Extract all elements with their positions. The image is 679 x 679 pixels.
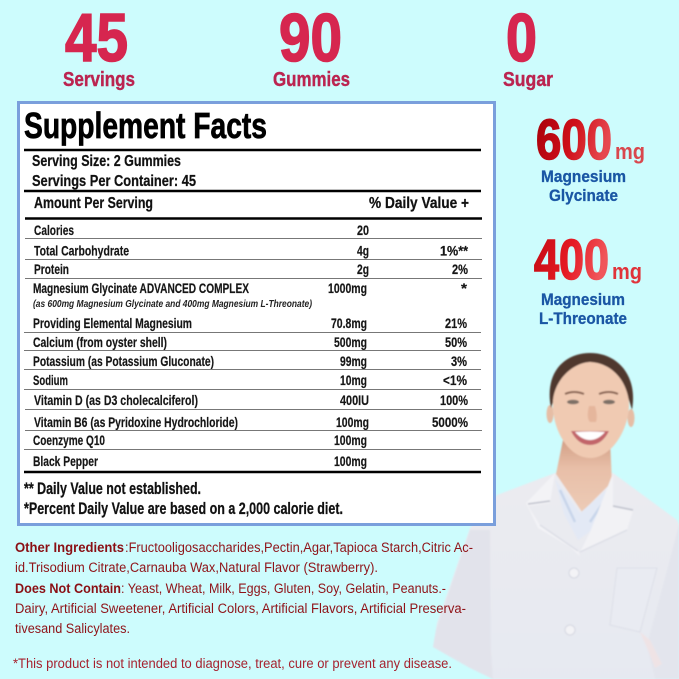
text block: does not contain: Does Not Contain xyxy=(15,581,121,596)
eyes xyxy=(567,400,579,404)
nutrient rows: 100mg xyxy=(334,433,367,448)
nutrient rows: 21% xyxy=(445,316,467,331)
nutrient rows: 50% xyxy=(445,335,467,350)
nutrient rows: Calories xyxy=(34,223,74,238)
photo: smiling woman in lab coat xyxy=(433,353,679,679)
nutrient rows: 5000% xyxy=(432,415,468,430)
callout: 400mg magnesium l-threonate: L-Threonate xyxy=(539,309,627,328)
smile xyxy=(571,431,609,445)
ears xyxy=(546,405,554,423)
nutrient rows xyxy=(24,223,482,469)
footnotes: *Percent Daily Value are based on a 2,000 calorie diet. xyxy=(24,500,343,518)
stat: 90 gummies: Gummies xyxy=(273,69,350,91)
text block: does not contain xyxy=(15,581,466,636)
callout: 400mg magnesium l-threonate: mg xyxy=(612,259,642,284)
coat lapels xyxy=(526,473,580,556)
pocket xyxy=(610,568,657,632)
neck xyxy=(556,440,612,512)
stat: 45 servings: 45 xyxy=(65,0,128,76)
nutrient rows: 99mg xyxy=(340,354,367,369)
nutrient rows: 100mg xyxy=(336,415,369,430)
text block: other ingredients: id.Trisodium Citrate,Carnauba Wax,Natural Flavor (Strawberry). xyxy=(15,560,378,575)
nutrient rows: 70.8mg xyxy=(331,316,367,331)
column headers: % Daily Value + xyxy=(369,195,469,212)
shirt collar xyxy=(555,479,613,540)
callout: 600mg magnesium glycinate: mg xyxy=(615,139,645,164)
nutrient rows: 100% xyxy=(440,393,468,408)
serving info: Serving Size: 2 Gummies xyxy=(32,153,181,170)
stat: 0 sugar: 0 xyxy=(506,0,537,76)
text block: other ingredients: Other Ingredients xyxy=(15,540,124,555)
text block: does not contain: Dairy, Artificial Sweetener, Artificial Colors, Artificial Flavors, Artificial Preserva- xyxy=(15,601,466,616)
nutrient rows: 4g xyxy=(357,244,369,258)
nutrient rows: Black Pepper xyxy=(33,454,99,469)
callout: 400mg magnesium l-threonate: Magnesium xyxy=(541,290,625,309)
callout: 600mg magnesium glycinate: 600 xyxy=(536,108,612,172)
nutrient rows: * xyxy=(461,281,468,296)
nutrient rows: Coenzyme Q10 xyxy=(33,433,105,448)
nutrient rows: 500mg xyxy=(334,335,367,350)
footnotes xyxy=(24,480,343,518)
column headers xyxy=(34,195,469,212)
nutrient rows: Potassium (as Potassium Gluconate) xyxy=(33,354,214,369)
buttons xyxy=(569,568,579,578)
disclaimer: *This product is not intended to diagnose, treat, cure or prevent any disease. xyxy=(13,656,452,671)
nutrient rows: 2g xyxy=(357,262,369,277)
column headers: Amount Per Serving xyxy=(34,195,153,212)
serving info: Servings Per Container: 45 xyxy=(32,173,196,190)
callout: 600mg magnesium glycinate: Magnesium xyxy=(541,167,626,186)
stat: 0 sugar: Sugar xyxy=(503,69,553,91)
nutrient rows: 100mg xyxy=(334,454,367,469)
nutrient rows: 1000mg xyxy=(328,281,367,296)
stat: 45 servings: Servings xyxy=(63,69,135,91)
nutrient rows: 20 xyxy=(357,223,369,238)
text block: does not contain: tivesand Salicylates. xyxy=(15,621,130,636)
callout: 400mg magnesium l-threonate xyxy=(534,228,642,328)
serving info xyxy=(32,153,196,190)
heading: supplement facts: Supplement Facts xyxy=(24,105,267,146)
nutrient rows: 400IU xyxy=(340,393,369,408)
nutrient rows: Calcium (from oyster shell) xyxy=(33,335,167,350)
callout: 600mg magnesium glycinate xyxy=(536,108,645,205)
nutrient rows: 3% xyxy=(451,354,467,369)
stat: 0 sugar xyxy=(503,0,553,91)
hair xyxy=(550,353,633,410)
nose xyxy=(588,406,597,422)
panel: supplement facts xyxy=(18,102,494,524)
eyebrows xyxy=(565,392,618,394)
face xyxy=(553,362,629,458)
nutrient rows: (as 600mg Magnesium Glycinate and 400mg Magnesium L-Threonate) xyxy=(33,299,313,310)
text block: other ingredients xyxy=(15,540,473,575)
callout: 600mg magnesium glycinate: Glycinate xyxy=(549,186,618,205)
nutrient rows: 1%** xyxy=(440,244,469,258)
nutrient rows: 2% xyxy=(452,262,468,277)
lab coat xyxy=(433,473,679,679)
nutrient rows: 10mg xyxy=(340,373,367,388)
nutrient rows: Total Carbohydrate xyxy=(34,244,129,258)
nutrient rows: Sodium xyxy=(33,373,68,388)
nutrient rows: Providing Elemental Magnesium xyxy=(33,316,192,331)
stat: 90 gummies: 90 xyxy=(279,0,342,76)
nutrient rows: Vitamin B6 (as Pyridoxine Hydrochloride) xyxy=(34,415,238,430)
nutrient rows: Magnesium Glycinate ADVANCED COMPLEX xyxy=(33,281,249,296)
footnotes: ** Daily Value not established. xyxy=(24,480,201,498)
nutrient rows: Vitamin D (as D3 cholecalciferol) xyxy=(34,393,198,408)
text block: other ingredients: :Fructooligosaccharides,Pectin,Agar,Tapioca Starch,Citric Ac- xyxy=(125,540,473,555)
callout: 400mg magnesium l-threonate: 400 xyxy=(534,228,609,292)
nutrient rows: Protein xyxy=(34,262,69,277)
text block: does not contain: : Yeast, Wheat, Milk, Eggs, Gluten, Soy, Gelatin, Peanuts.- xyxy=(121,581,446,596)
nutrient rows: <1% xyxy=(443,373,467,388)
